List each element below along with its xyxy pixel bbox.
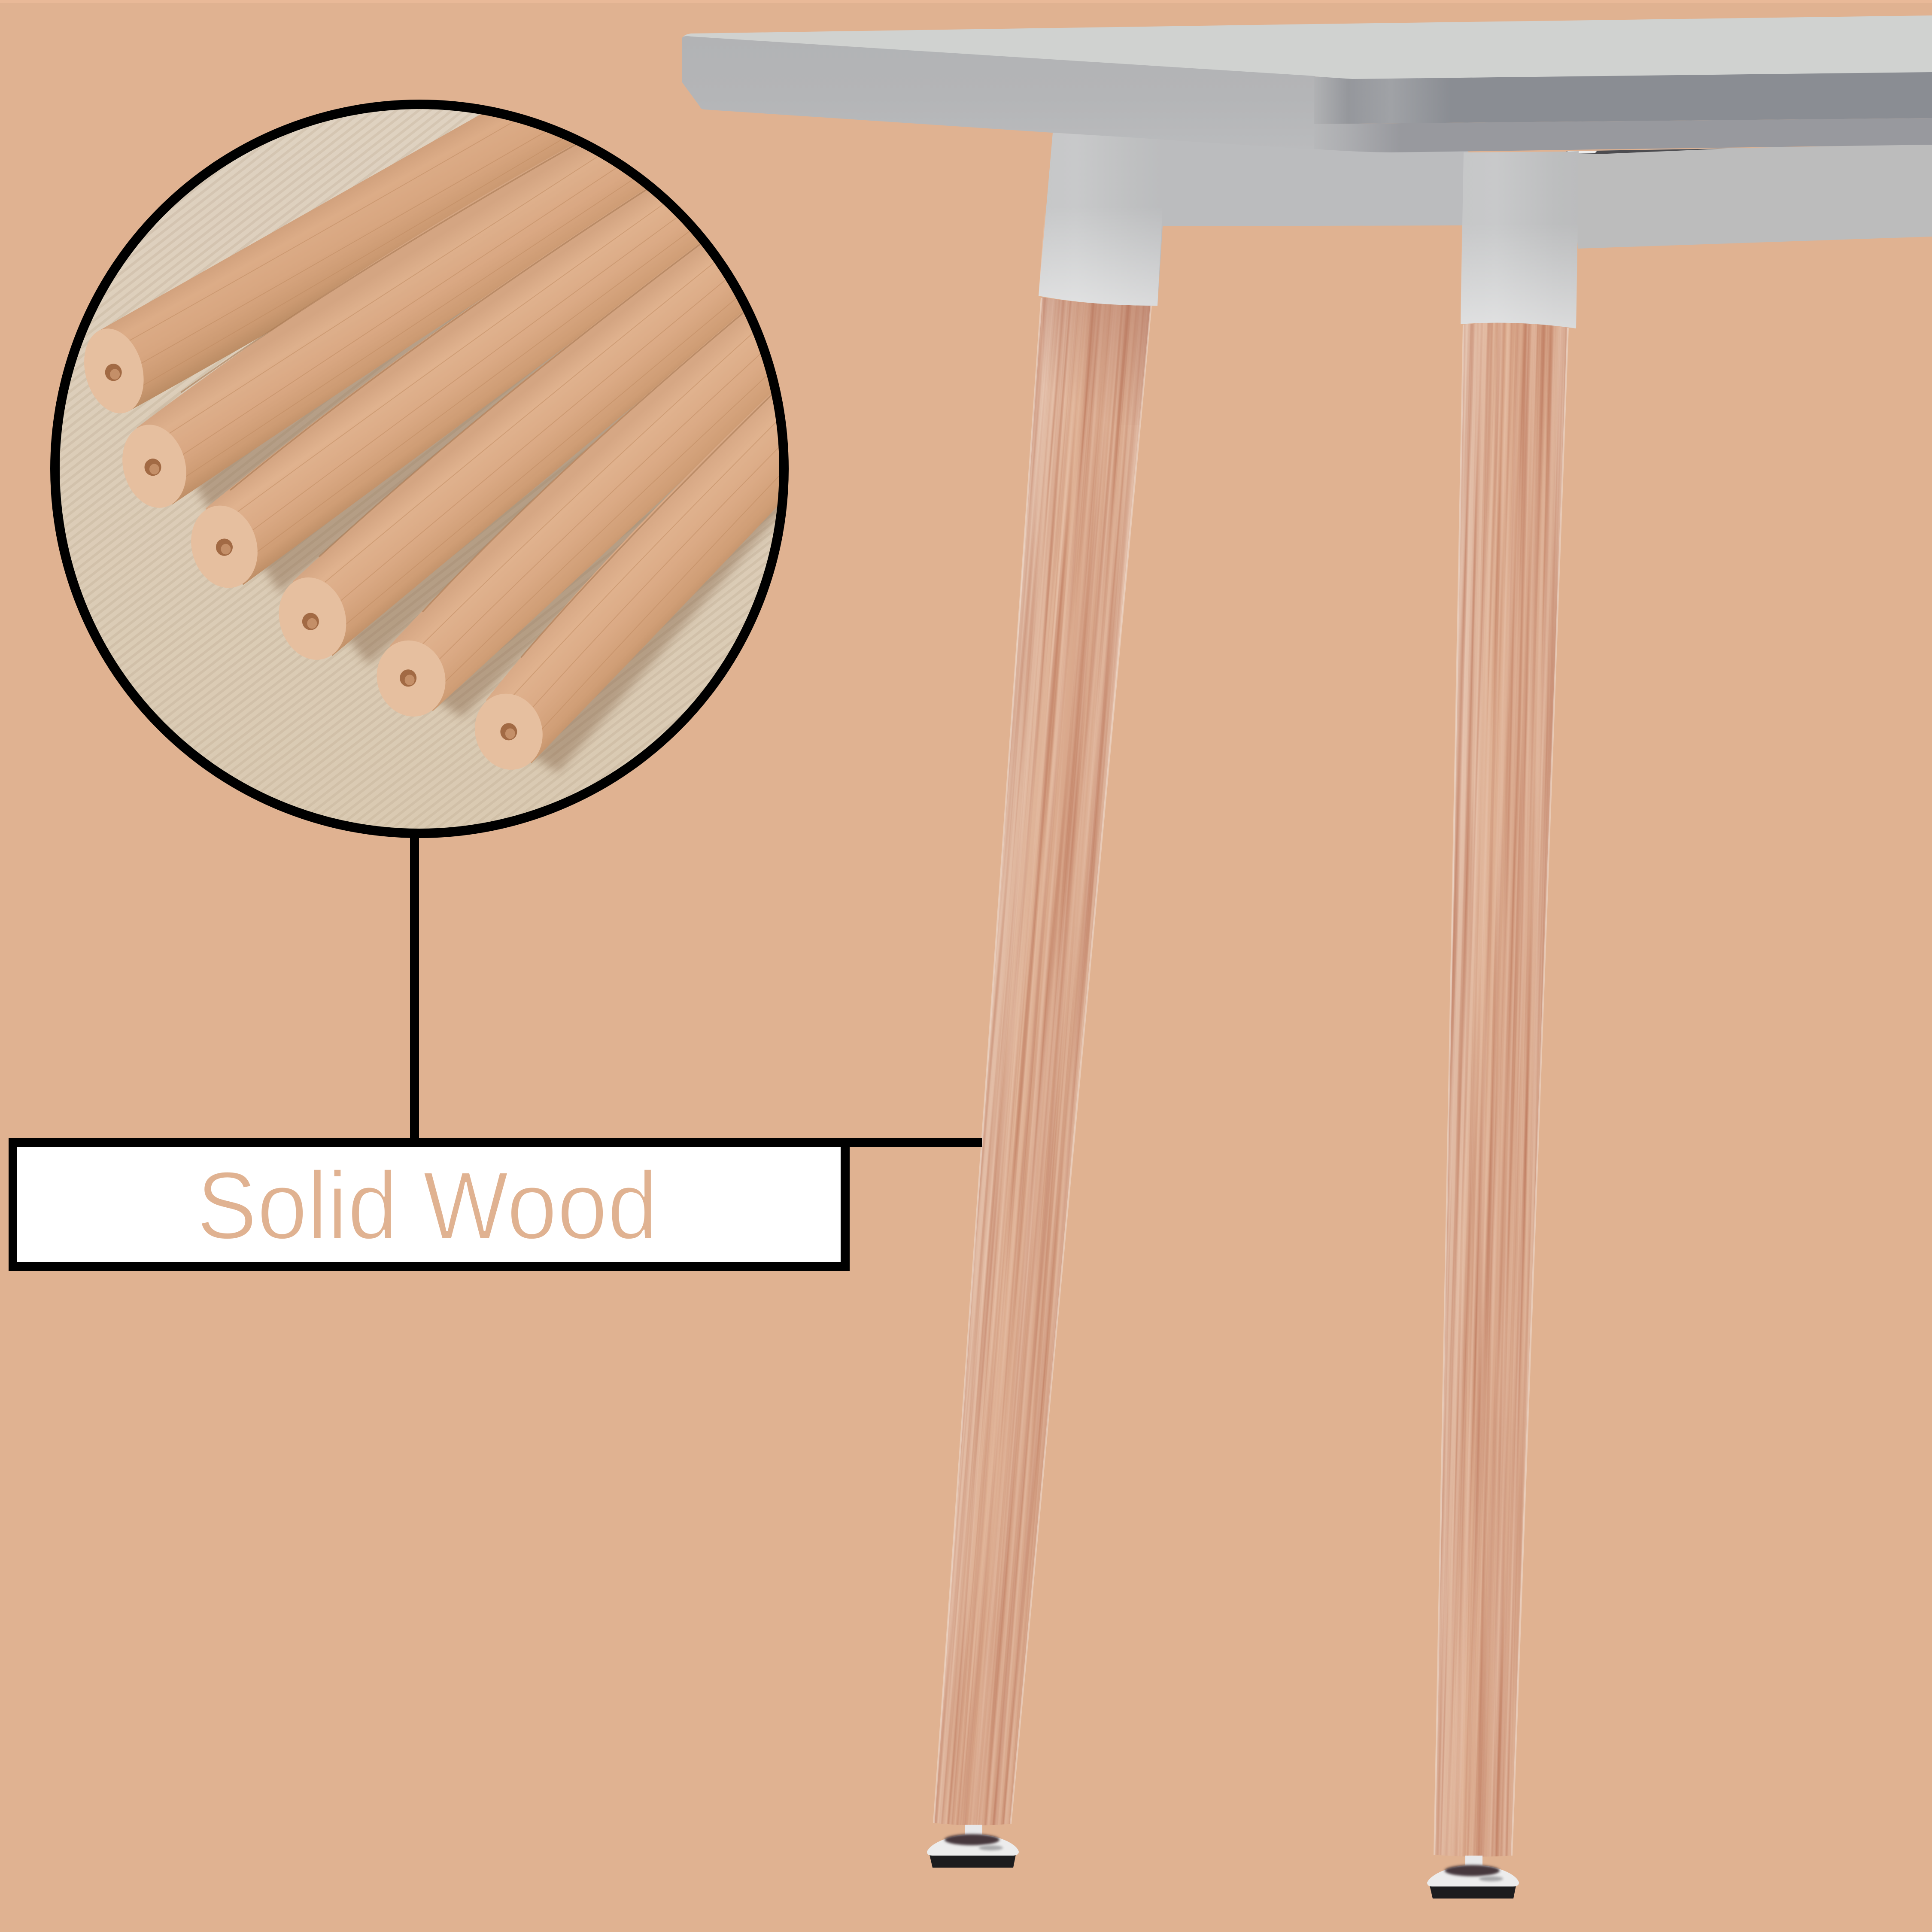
rod 4 upper seam bbox=[319, 222, 730, 557]
rod 2 end face bbox=[114, 418, 195, 514]
bracket: right leg socket bbox=[1461, 151, 1579, 328]
leg 1 top shadow bbox=[1043, 296, 1159, 425]
connector line from label to leg bbox=[846, 1138, 982, 1147]
bracket: left leg socket bbox=[1039, 133, 1164, 306]
rod 2 bbox=[114, 128, 671, 514]
rod 4 body bbox=[293, 220, 772, 656]
foot dome reflection bbox=[945, 1834, 999, 1845]
rod 4 grain bbox=[307, 240, 763, 641]
foot dome reflection bbox=[1445, 1865, 1500, 1876]
rod 6 grain bbox=[495, 399, 802, 752]
foot glide: left leg bbox=[927, 1825, 1019, 1868]
table long front edge upper band bbox=[1314, 72, 1932, 124]
socket body bbox=[1039, 133, 1164, 306]
rod 2 grain bbox=[149, 143, 654, 490]
cloth ribs bbox=[56, 105, 784, 833]
rod 6 body bbox=[486, 368, 805, 763]
foot chrome dome bbox=[1427, 1865, 1519, 1886]
leg 2 edge highlight bbox=[1434, 325, 1568, 1856]
rod 6 upper seam bbox=[521, 370, 797, 657]
rod 3 hole inner bbox=[221, 544, 231, 554]
rod 6 end face bbox=[467, 687, 551, 777]
rod 3 body bbox=[206, 172, 730, 585]
rod 5 hole inner bbox=[405, 674, 415, 685]
cloth surface bbox=[56, 105, 784, 833]
label text: Solid Wood bbox=[197, 1152, 658, 1259]
foot black base bbox=[1430, 1886, 1516, 1899]
rod 6 bbox=[467, 368, 805, 777]
rod 1 grain bbox=[107, 109, 585, 396]
label box fill bbox=[17, 1147, 841, 1262]
leg 1 bbox=[934, 297, 1151, 1826]
leg 2 light grain bbox=[1400, 298, 1589, 1882]
foot dome grey reflection bbox=[1479, 1876, 1503, 1881]
table short side edge bbox=[682, 36, 1315, 149]
socket highlight bbox=[1039, 206, 1163, 306]
connector line from circle to label bbox=[410, 835, 419, 1140]
metal clip bbox=[1567, 151, 1597, 154]
rod 3 upper seam bbox=[230, 173, 671, 490]
rod 2 upper seam bbox=[181, 129, 603, 392]
rod 3 hole bbox=[216, 539, 233, 556]
rod 4 hole inner bbox=[307, 618, 317, 629]
rod 4 bbox=[270, 220, 772, 667]
leg 2 dark grain bbox=[1400, 298, 1589, 1882]
rod 3 grain bbox=[216, 188, 716, 566]
foot glide: right leg bbox=[1427, 1856, 1519, 1899]
rod 1 hole bbox=[105, 364, 122, 381]
apron left section bbox=[1116, 135, 1468, 226]
rod 3 end face bbox=[182, 498, 266, 595]
foot chrome dome bbox=[927, 1834, 1019, 1856]
leg 2 bbox=[1400, 298, 1589, 1882]
top edge strip bbox=[0, 0, 1932, 3]
rod 1 hole inner bbox=[110, 369, 120, 380]
label box border bbox=[9, 1138, 850, 1271]
table long front edge lower band bbox=[1314, 118, 1932, 152]
rod 1 end face bbox=[76, 322, 152, 419]
circle ring bbox=[55, 104, 784, 833]
rod 6 hole bbox=[500, 723, 517, 740]
metal gap under table bbox=[1566, 149, 1728, 154]
rod 2 hole bbox=[144, 459, 161, 476]
rod 5 bbox=[368, 287, 797, 724]
rod 1 body bbox=[98, 99, 603, 411]
socket body bbox=[1461, 151, 1579, 328]
rod 5 body bbox=[389, 287, 797, 711]
callout circle: wooden legs close-up bbox=[55, 99, 805, 833]
rod 2 hole inner bbox=[149, 464, 159, 474]
rod 6 hole inner bbox=[505, 728, 515, 739]
rods bbox=[76, 99, 805, 777]
rod 5 grain bbox=[407, 310, 791, 699]
foot black base bbox=[930, 1855, 1016, 1868]
rod 4 end face bbox=[270, 571, 355, 667]
rod 5 hole bbox=[400, 669, 416, 687]
leg 1 edge highlight bbox=[934, 298, 1151, 1824]
rod 4 hole bbox=[302, 613, 319, 630]
socket highlight bbox=[1461, 223, 1578, 328]
foot stem bbox=[965, 1825, 982, 1835]
rod 1 bbox=[76, 99, 603, 419]
rod 5 upper seam bbox=[422, 289, 772, 612]
close-up photo bbox=[56, 99, 805, 833]
leg 1 dark grain bbox=[934, 297, 1150, 1826]
leg 1 light grain bbox=[896, 269, 1170, 1856]
foot dome grey reflection bbox=[979, 1845, 1003, 1850]
apron right section bbox=[1571, 144, 1932, 249]
table bbox=[682, 15, 1932, 249]
leg 1 base bbox=[936, 297, 1147, 1826]
rod shadows bbox=[156, 143, 805, 772]
rod 5 end face bbox=[368, 633, 454, 724]
leg 2 base bbox=[1425, 318, 1576, 1863]
rod 3 bbox=[182, 172, 730, 595]
table top surface bbox=[682, 15, 1932, 79]
foot stem bbox=[1465, 1856, 1482, 1866]
rod 2 body bbox=[137, 128, 671, 504]
label box bbox=[9, 1138, 850, 1271]
